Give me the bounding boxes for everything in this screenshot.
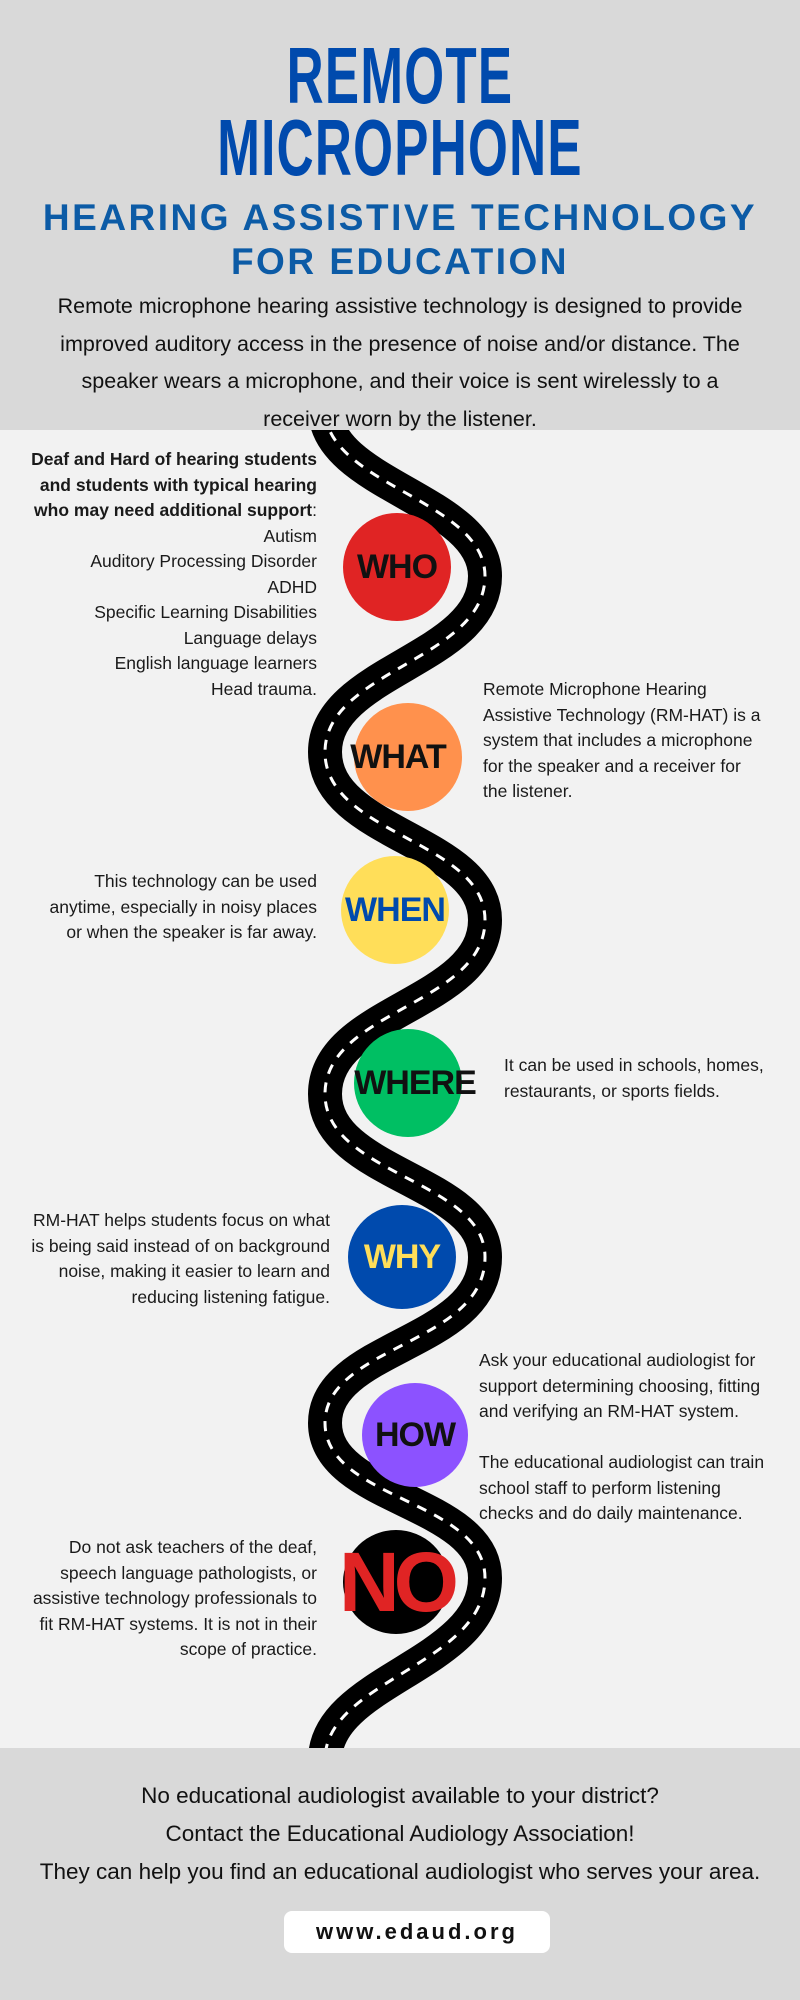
why text: noise, making it easier to learn and	[59, 1261, 330, 1281]
what text: the listener.	[483, 781, 572, 801]
circle: why: WHY	[364, 1238, 440, 1276]
who text: and students with typical hearing	[40, 474, 317, 494]
where text	[504, 1055, 764, 1100]
road	[308, 430, 502, 1748]
subtitle: HEARING ASSISTIVE TECHNOLOGY	[43, 197, 757, 238]
who text: ADHD	[267, 576, 317, 596]
where text: restaurants, or sports fields.	[504, 1080, 720, 1100]
what text: for the speaker and a receiver for	[483, 756, 741, 776]
circle: who: WHO	[357, 548, 437, 586]
subtitle	[43, 197, 757, 282]
no text: fit RM-HAT systems. It is not in their	[40, 1614, 317, 1634]
what text: Assistive Technology (RM-HAT) is a	[483, 704, 760, 724]
no text	[33, 1537, 317, 1659]
circle: how: HOW	[375, 1416, 455, 1454]
circle: who	[343, 513, 451, 621]
when text	[50, 871, 317, 942]
why text: RM-HAT helps students focus on what	[33, 1210, 330, 1230]
website button: www.edaud.org	[316, 1919, 518, 1944]
who text: Head trauma.	[211, 678, 317, 698]
no text: assistive technology professionals to	[33, 1588, 317, 1608]
why text: is being said instead of on background	[31, 1236, 330, 1256]
how text: checks and do daily maintenance.	[479, 1503, 743, 1523]
what text: Remote Microphone Hearing	[483, 679, 707, 699]
when text: anytime, especially in noisy places	[50, 896, 317, 916]
title	[217, 31, 583, 192]
no text: Do not ask teachers of the deaf,	[69, 1537, 317, 1557]
who text: Language delays	[184, 628, 317, 648]
what text	[483, 679, 760, 801]
who text: who may need additional support:	[34, 500, 317, 520]
where text: It can be used in schools, homes,	[504, 1055, 764, 1075]
circle: where: WHERE	[354, 1064, 476, 1102]
subtitle: FOR EDUCATION	[231, 241, 569, 282]
footer text: No educational audiologist available to your district?	[141, 1783, 659, 1808]
how text	[479, 1350, 764, 1523]
circle: no: NO	[339, 1534, 453, 1628]
intro text: receiver worn by the listener.	[263, 406, 537, 430]
circle: what: WHAT	[350, 738, 446, 776]
intro text: Remote microphone hearing assistive technology is designed to provide	[58, 294, 742, 318]
footer text: Contact the Educational Audiology Association!	[165, 1821, 635, 1846]
website button	[284, 1911, 550, 1953]
intro text: speaker wears a microphone, and their voice is sent wirelessly to a	[82, 369, 718, 393]
how text: support determining choosing, fitting	[479, 1376, 760, 1396]
circle: where	[354, 1029, 462, 1137]
how text: The educational audiologist can train	[479, 1452, 764, 1472]
circle: when	[341, 856, 449, 964]
what text: system that includes a microphone	[483, 730, 752, 750]
when text: or when the speaker is far away.	[66, 922, 317, 942]
circle: how	[362, 1383, 468, 1487]
who text: Specific Learning Disabilities	[94, 602, 317, 622]
how text: Ask your educational audiologist for	[479, 1350, 755, 1370]
header band	[0, 0, 800, 430]
footer text: They can help you find an educational audiologist who serves your area.	[40, 1859, 760, 1884]
who text	[31, 449, 317, 698]
intro text: improved auditory access in the presence of noise and/or distance. The	[60, 332, 740, 356]
intro text	[58, 294, 742, 430]
who text: Auditory Processing Disorder	[90, 551, 317, 571]
how text: and verifying an RM-HAT system.	[479, 1401, 739, 1421]
circle: what	[354, 703, 462, 811]
footer band	[0, 1748, 800, 2000]
who text: Autism	[264, 526, 317, 546]
title: REMOTE	[287, 31, 513, 120]
who text: Deaf and Hard of hearing students	[31, 449, 317, 469]
who text: English language learners	[115, 653, 317, 673]
circle: when: WHEN	[345, 890, 445, 928]
no text: speech language pathologists, or	[60, 1562, 317, 1582]
no text: scope of practice.	[180, 1639, 317, 1659]
circle: why	[348, 1205, 456, 1309]
why text: reducing listening fatigue.	[132, 1286, 330, 1306]
when text: This technology can be used	[94, 871, 317, 891]
why text	[31, 1210, 330, 1306]
footer text	[40, 1783, 760, 1884]
title: MICROPHONE	[217, 103, 583, 192]
how text: school staff to perform listening	[479, 1478, 721, 1498]
